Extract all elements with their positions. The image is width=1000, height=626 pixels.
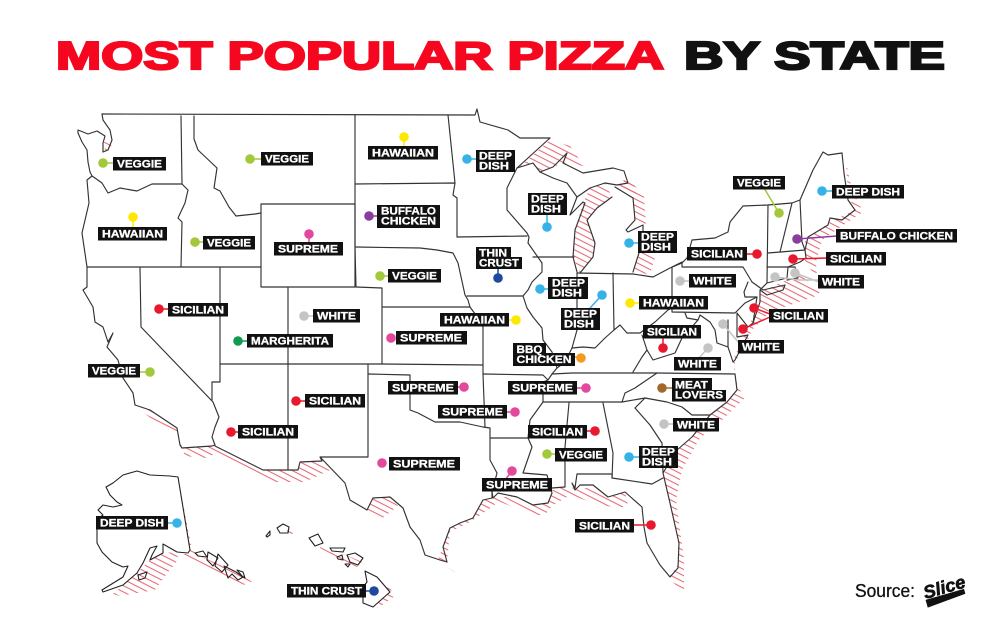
- label: Florida sicilian: SICILIAN: [579, 521, 630, 533]
- label: North Dakota hawaiian: HAWAIIAN: [372, 148, 434, 160]
- label: New Hampshire buffalo chicken: BUFFALO CHICKEN: [840, 231, 953, 243]
- label: Pennsylvania white: [675, 274, 736, 288]
- label: Iowa thin crust: CRUST: [479, 258, 519, 270]
- label: Michigan deep dish: [624, 231, 677, 254]
- label: Louisiana supreme: SUPREME: [486, 480, 548, 492]
- label: Missouri BBQ chicken: CHICKEN: [516, 354, 572, 366]
- label: Kentucky supreme: [508, 381, 591, 395]
- label: Kansas supreme: [386, 331, 467, 345]
- map: Hawaii: [266, 524, 390, 607]
- label: California veggie: VEGGIE: [92, 366, 136, 378]
- label: Montana veggie: [245, 152, 313, 166]
- label: Nevada sicilian: SICILIAN: [172, 305, 224, 317]
- label: Pennsylvania white: WHITE: [693, 276, 732, 288]
- label: Arizona sicilian: [226, 425, 298, 439]
- label: Missouri BBQ chicken: [513, 343, 586, 366]
- label: Virginia white: [674, 343, 721, 371]
- label: Illinois deep dish: [535, 277, 588, 300]
- label: Nebraska veggie: VEGGIE: [392, 271, 437, 283]
- label: New Mexico sicilian: [291, 394, 365, 408]
- label: Vermont veggie: [733, 176, 785, 218]
- label: Nebraska veggie: [375, 269, 441, 283]
- label: West Virginia sicilian: [643, 325, 701, 353]
- label: Iowa thin crust: THIN: [479, 248, 507, 260]
- label: Utah margherita: [233, 334, 333, 348]
- label: Wisconsin deep dish: [528, 193, 567, 232]
- label: Missouri hawaiian: [440, 313, 521, 327]
- label: Oregon hawaiian: HAWAIIAN: [102, 229, 163, 241]
- label: Mississippi veggie: [542, 448, 607, 462]
- label: Colorado white: [299, 309, 360, 323]
- label: Arizona sicilian: SICILIAN: [242, 427, 294, 439]
- label: Tennessee sicilian: [528, 425, 600, 439]
- label: Washington veggie: VEGGIE: [117, 159, 162, 171]
- label: Missouri hawaiian: HAWAIIAN: [444, 315, 505, 327]
- label: Ohio hawaiian: [625, 296, 708, 310]
- label: South Carolina white: [659, 418, 719, 432]
- label: Oregon hawaiian: [98, 212, 167, 241]
- label: Iowa thin crust: [476, 247, 522, 283]
- label: Colorado white: WHITE: [317, 311, 356, 323]
- label: Idaho veggie: VEGGIE: [207, 238, 251, 250]
- label: Wyoming supreme: SUPREME: [278, 244, 338, 256]
- label: Indiana deep dish: DISH: [564, 319, 594, 331]
- label: West Virginia sicilian: SICILIAN: [647, 327, 697, 339]
- label: Wisconsin deep dish: DEEP: [531, 194, 564, 206]
- title: BY STATE: [684, 35, 945, 78]
- label: Montana veggie: VEGGIE: [265, 154, 309, 166]
- label: Minnesota deep dish: DEEP: [479, 151, 512, 163]
- label: Alaska deep dish: [96, 516, 182, 530]
- label: Maine deep dish: [817, 185, 904, 199]
- label: Vermont veggie: VEGGIE: [737, 178, 781, 190]
- label: Arkansas supreme: SUPREME: [442, 407, 503, 419]
- label: New York sicilian: SICILIAN: [691, 249, 743, 261]
- label: Illinois deep dish: DISH: [552, 288, 582, 300]
- source credit: Source:: [855, 581, 915, 601]
- label: Connecticut and Rhode Island white: WHITE: [822, 277, 860, 289]
- label: Georgia deep dish: [624, 446, 678, 469]
- label: Hawaii thin crust: [287, 584, 379, 598]
- label: Connecticut and Rhode Island white: [770, 268, 864, 289]
- label: Georgia deep dish: DEEP: [642, 447, 675, 459]
- label: Kentucky supreme: SUPREME: [512, 383, 573, 395]
- label: Utah margherita: MARGHERITA: [251, 336, 329, 348]
- label: Idaho veggie: [190, 236, 255, 250]
- label: Minnesota deep dish: DISH: [479, 161, 509, 173]
- label: Texas supreme: SUPREME: [393, 459, 455, 471]
- label: Ohio hawaiian: HAWAIIAN: [643, 298, 704, 310]
- label: California veggie: [88, 364, 155, 378]
- label: South Dakota buffalo chicken: [364, 205, 440, 228]
- label: Michigan deep dish: DISH: [641, 242, 671, 254]
- label: New Jersey and Delaware sicilian: SICILIAN: [773, 311, 824, 323]
- label: North Carolina meat lovers: MEAT: [675, 380, 708, 392]
- label: Massachusetts sicilian: SICILIAN: [830, 254, 882, 266]
- label: New Mexico sicilian: SICILIAN: [309, 396, 361, 408]
- label: North Dakota hawaiian: [368, 132, 438, 160]
- label: Maryland white: WHITE: [742, 342, 780, 354]
- label: Illinois deep dish: DEEP: [552, 278, 585, 290]
- label: North Carolina meat lovers: [657, 378, 726, 402]
- label: Wyoming supreme: [274, 229, 343, 256]
- label: New Jersey and Delaware sicilian: [738, 303, 828, 334]
- label: Washington veggie: [98, 157, 166, 171]
- label: Tennessee sicilian: SICILIAN: [532, 427, 583, 439]
- label: Indiana deep dish: [561, 290, 607, 331]
- label: Mississippi veggie: VEGGIE: [559, 450, 603, 462]
- label: Louisiana supreme: [482, 466, 552, 492]
- logo: Slice: Slice: [921, 572, 968, 603]
- label: Oklahoma supreme: SUPREME: [392, 383, 454, 395]
- label: New Hampshire buffalo chicken: [792, 229, 957, 244]
- label: North Carolina meat lovers: LOVERS: [675, 390, 723, 402]
- label: South Carolina white: WHITE: [677, 420, 715, 432]
- label: South Dakota buffalo chicken: BUFFALO: [381, 206, 436, 218]
- label: New York sicilian: [687, 247, 762, 261]
- label: Maryland white: [718, 319, 784, 354]
- label: Minnesota deep dish: [462, 150, 515, 173]
- label: Kansas supreme: SUPREME: [400, 333, 462, 345]
- label: Wisconsin deep dish: DISH: [531, 204, 561, 216]
- label: Maine deep dish: DEEP DISH: [836, 187, 900, 199]
- label: Massachusetts sicilian: [788, 252, 886, 266]
- title: MOST POPULAR PIZZA: [56, 35, 664, 78]
- title: [56, 35, 945, 78]
- label: Indiana deep dish: DEEP: [564, 309, 597, 321]
- label: Missouri BBQ chicken: BBQ: [516, 344, 542, 356]
- label: South Dakota buffalo chicken: CHICKEN: [381, 216, 436, 228]
- label: Arkansas supreme: [438, 405, 520, 419]
- label: Oklahoma supreme: [388, 381, 469, 395]
- map of US states: [78, 109, 855, 577]
- label: Hawaii thin crust: THIN CRUST: [291, 586, 362, 598]
- label: Georgia deep dish: DISH: [642, 457, 672, 469]
- map: Alaska: [97, 471, 245, 592]
- label: Alaska deep dish: DEEP DISH: [100, 518, 164, 530]
- label: Florida sicilian: [575, 519, 656, 533]
- label: Virginia white: WHITE: [678, 359, 717, 371]
- coastal hatching: [104, 140, 863, 608]
- label: Texas supreme: [377, 457, 460, 471]
- label: Nevada sicilian: [154, 303, 228, 317]
- label: Michigan deep dish: DEEP: [641, 232, 674, 244]
